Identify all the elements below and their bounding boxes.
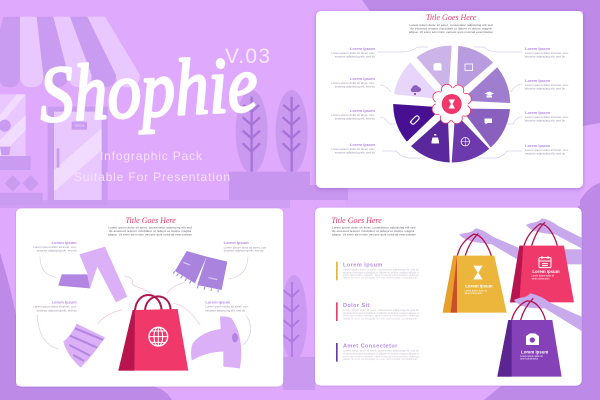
left labels	[331, 46, 375, 154]
icon: pants	[58, 247, 127, 302]
intro text: do eiusmod tempor incididunt ut labore et dolore magna	[332, 229, 414, 233]
labels: Lorem Ipsum	[52, 300, 77, 305]
intro text	[409, 23, 493, 34]
center hourglass icon	[442, 94, 462, 114]
icon: purple bag	[497, 298, 562, 377]
panel title: Title Goes Here	[426, 13, 477, 22]
labels: Lorem ipsum dolor sit amet, con-	[224, 245, 267, 249]
icon: yellow bag: Lorem Ipsum	[465, 284, 493, 289]
list item: Dolor Sit: Lorem ipsum dolor sit amet, consectetur adipiscing elit, sed do	[343, 308, 419, 312]
version label: V.03	[225, 45, 270, 68]
left labels: Lorem Ipsum	[350, 108, 375, 113]
labels: sectetur adipiscing elit, sed do	[224, 249, 264, 253]
icon: purple bag: amet consectetur	[520, 358, 538, 361]
icon: red bag: Lorem Ipsum	[532, 269, 560, 274]
intro text: aliqua. Ut enim ad minim veniam quis nostrud exercitation	[108, 233, 192, 237]
intro text: Lorem ipsum dolor sit amet, consectetur adipiscing elit sed	[410, 23, 493, 27]
left labels: sectetur adipiscing elit, sed do	[335, 84, 375, 88]
trees and planter	[229, 90, 310, 200]
awning	[0, 17, 140, 87]
left labels: Lorem Ipsum	[350, 142, 375, 147]
list item: Lorem Ipsum: enim ad minim veniam, quis nostrud exercitation ullamco	[343, 273, 419, 277]
list item: Dolor Sit: laboris nisi ut aliquip ex ea commodo consequat	[343, 316, 417, 320]
right labels: sectetur adipiscing elit, sed do	[525, 152, 566, 156]
list item: Amet Consectetur: enim ad minim veniam, quis nostrud exercitation ullamco	[343, 354, 419, 358]
left labels: Lorem ipsum dolor sit amet, con-	[331, 51, 375, 55]
intro text: Lorem ipsum dolor sit amet, consectetur adipiscing elit sed	[332, 226, 416, 230]
icon: purple bag: Lorem ipsum dolor sit	[520, 355, 543, 358]
left labels: Lorem ipsum dolor sit amet, con-	[331, 113, 375, 117]
list item: Lorem Ipsum: laboris nisi ut aliquip ex ea commodo consequat	[343, 276, 417, 280]
left labels: Lorem ipsum dolor sit amet, con-	[331, 81, 375, 85]
right labels: Lorem ipsum dolor sit amet, con-	[525, 148, 569, 152]
list item: Amet Consectetur: Lorem ipsum dolor sit amet, consectetur adipiscing elit, sed do	[343, 349, 419, 353]
list item: Dolor Sit: enim ad minim veniam, quis nostrud exercitation ullamco	[343, 314, 419, 318]
subtitle	[74, 149, 230, 184]
right labels: sectetur adipiscing elit, sed do	[525, 54, 566, 58]
list item: Dolor Sit: Dolor Sit	[343, 303, 369, 309]
left labels: sectetur adipiscing elit, sed do	[335, 116, 375, 120]
main title: Shophie	[37, 40, 260, 140]
icon: red bag: Lorem ipsum dolor sit	[532, 275, 554, 278]
wheel chart	[393, 46, 510, 162]
labels	[33, 240, 267, 312]
labels: Lorem ipsum dolor sit amet, con-	[205, 305, 249, 309]
curly connectors	[97, 276, 200, 325]
panel: circular diagram	[316, 11, 583, 188]
labels: Lorem ipsum dolor sit amet, con-	[33, 305, 77, 309]
list item: Amet Consectetur	[336, 343, 419, 362]
icon: yellow bag	[443, 233, 507, 313]
icon: shorts	[173, 251, 227, 292]
panel title: Title Goes Here	[126, 216, 176, 225]
icon: yellow bag: amet consectetur	[465, 292, 483, 295]
labels: Lorem Ipsum	[205, 300, 231, 305]
right labels	[525, 46, 569, 156]
labels: sectetur adipiscing elit, sed do	[37, 248, 77, 252]
right labels: Lorem Ipsum	[525, 110, 551, 115]
left labels: sectetur adipiscing elit, sed do	[335, 150, 375, 154]
list item: Amet Consectetur: Amet Consectetur	[343, 344, 398, 350]
icon: yellow bag: Lorem ipsum dolor sit	[465, 289, 487, 292]
left labels: sectetur adipiscing elit, sed do	[335, 54, 375, 58]
left labels: Lorem Ipsum	[350, 76, 375, 81]
small lower tree	[281, 275, 315, 390]
labels: sectetur adipiscing elit, sed do	[205, 308, 246, 312]
right labels: sectetur adipiscing elit, sed do	[525, 118, 566, 122]
intro text: do eiusmod tempor incididunt ut labore et dolore magna	[109, 229, 191, 233]
right labels: sectetur adipiscing elit, sed do	[525, 86, 566, 90]
inner scallops	[432, 84, 471, 124]
labels: Lorem Ipsum	[224, 240, 249, 245]
icon: red bag: amet consectetur	[532, 277, 550, 280]
list item: Lorem Ipsum: Lorem Ipsum	[343, 263, 382, 269]
right labels: Lorem ipsum dolor sit amet, con-	[525, 115, 569, 119]
labels: sectetur adipiscing elit, sed do	[37, 308, 77, 312]
right labels: Lorem ipsum dolor sit amet, con-	[525, 51, 569, 55]
subtitle: Infographic Pack	[100, 149, 203, 163]
icon: shopping bag with globe	[118, 295, 188, 371]
panel: three hand-held bags	[315, 208, 582, 386]
connector curves	[37, 257, 251, 349]
intro text: aliqua. Ut enim ad minim veniam quis nostrud exercitation	[332, 233, 416, 237]
list item: Lorem Ipsum: eiusmod tempor incididunt ut labore et dolore magna aliqua ut	[343, 270, 419, 274]
right labels: Lorem Ipsum	[525, 143, 551, 148]
list item: Lorem Ipsum: Lorem ipsum dolor sit amet, consectetur adipiscing elit, sed do	[343, 267, 419, 271]
left labels: Lorem ipsum dolor sit amet, con-	[331, 147, 375, 151]
icon: skirt	[63, 324, 105, 368]
list item: Dolor Sit	[336, 302, 419, 321]
intro text: Lorem ipsum dolor sit amet, consectetur adipiscing elit sed	[108, 226, 192, 230]
list item: Dolor Sit: eiusmod tempor incididunt ut labore et dolore magna aliqua ut	[343, 311, 419, 315]
left labels: Lorem Ipsum	[350, 46, 375, 51]
wheel icons	[410, 63, 494, 146]
intro text	[108, 226, 192, 237]
hand: red bag	[526, 218, 582, 248]
hand: yellow bag	[459, 228, 518, 260]
labels: Lorem ipsum dolor sit amet, con-	[33, 245, 77, 249]
labels: Lorem Ipsum	[52, 240, 77, 245]
right labels: Lorem Ipsum	[525, 78, 551, 83]
panel: clothes and shopping bag	[16, 208, 283, 387]
right labels: Lorem ipsum dolor sit amet, con-	[525, 83, 569, 87]
storefront illustration	[0, 17, 140, 205]
shop door	[48, 107, 108, 205]
intro text: do eiusmod tempor incididunt ut labore et dolore magna	[410, 26, 492, 30]
icon: shirt	[191, 316, 241, 368]
intro text	[332, 226, 416, 237]
list item: Lorem Ipsum	[336, 262, 419, 280]
right labels: Lorem Ipsum	[525, 46, 551, 51]
panel title: Title Goes Here	[332, 216, 382, 225]
icon: purple bag: Lorem Ipsum	[521, 349, 548, 354]
connector lines	[378, 47, 522, 158]
shop door: OPEN	[75, 124, 85, 128]
list item: Amet Consectetur: eiusmod tempor incididunt ut labore et dolore magna aliqua ut	[343, 352, 419, 356]
list item: Amet Consectetur: laboris nisi ut aliquip ex ea commodo consequat	[343, 357, 417, 361]
icon: red bag	[510, 222, 574, 302]
subtitle: Suitable For Presentation	[74, 170, 230, 184]
intro text: aliqua. Ut enim ad minim veniam quis nostrud exercitation	[409, 30, 493, 34]
hand: purple bag	[514, 293, 582, 331]
shop window	[0, 94, 43, 205]
